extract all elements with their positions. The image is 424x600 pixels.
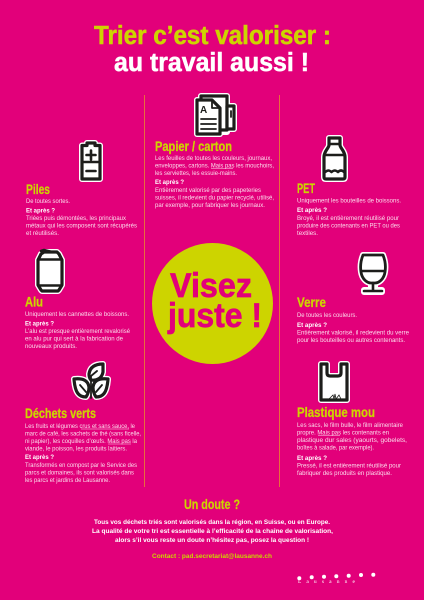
heading: Alu (25, 294, 43, 310)
text block: Transformés en compost par le Service des (25, 462, 138, 469)
text block: De toutes les couleurs. (297, 312, 357, 319)
text block: Et après ? (297, 207, 327, 214)
text block: Et après ? (297, 322, 327, 329)
heading: Piles (26, 182, 50, 197)
callout: visez juste: Visez (170, 267, 252, 305)
text block: textiles. (297, 230, 318, 237)
text block: marc de café, les sachets de thé (sans ficelle, (25, 430, 141, 438)
text block (297, 198, 401, 237)
logo: lausanne: L a u s a n n e (298, 579, 356, 585)
callout: visez juste (152, 243, 273, 364)
text block: Entièrement valorisé, il redevient du verre (297, 330, 409, 336)
icon: plastic bag (321, 364, 347, 400)
text block: closing message (92, 519, 333, 544)
text block: les parcs et jardins de Lausanne. (25, 477, 110, 484)
heading: PET (297, 181, 316, 196)
text block (25, 311, 130, 350)
text block: suisses, il redevient du papier recyclé, utilisé, (155, 194, 274, 202)
text block: boîtes à salade, par exemple). (297, 444, 374, 452)
title: au travail aussi ! (114, 49, 309, 77)
text block: Et après ? (297, 455, 327, 462)
text block (26, 198, 138, 237)
icon: battery (82, 143, 100, 179)
panel: papier carton (155, 96, 274, 209)
panel: verre (297, 255, 409, 344)
icon: wine glass (361, 255, 385, 292)
text block: propre. Mais pas les contenants en (297, 430, 389, 436)
text block: closing message: alors s’il vous reste un doute n’hésitez pas, posez la question ! (115, 537, 309, 544)
text block: métaux qui les composent sont récupérés (26, 222, 138, 230)
text block: closing message: La qualité de votre tri est essentielle à l’efficacité de la chaîne de valorisation, (92, 528, 333, 535)
text block: L’alu est presque entièrement revalorisé (25, 328, 130, 335)
text block (297, 422, 407, 477)
text block: plastique dur sales (yaourts, gobelets, (297, 437, 407, 444)
icon: leaves (74, 364, 108, 398)
text block: Uniquement les cannettes de boissons. (25, 311, 129, 318)
text block: les serviettes, les essuie-mains. (155, 170, 237, 177)
contact: Contact : pad.secretariat@lausanne.ch (152, 553, 272, 560)
text block: closing message: Tous vos déchets triés sont valorisés dans la région, en Suisse, ou en Europe. (94, 519, 330, 526)
text block: et réutilisés. (26, 230, 59, 237)
heading: Verre (297, 295, 326, 310)
title: Trier c’est valoriser : (94, 22, 331, 50)
text block: fabriquer des produits en plastique. (297, 470, 392, 477)
callout: visez juste: juste ! (167, 297, 262, 335)
text block: Les sacs, le film bulle, le film alimentaire (297, 422, 403, 429)
text block (155, 155, 274, 209)
text block: ni papier), les coquilles d’œufs. Mais pas la (25, 438, 137, 445)
text block: Les fruits et légumes crus et sans sauce, le (25, 423, 135, 430)
heading: un doute: Un doute ? (184, 497, 240, 512)
text block: par exemple, pour fabriquer les journaux. (155, 202, 265, 209)
text block: Entièrement valorisé par des papeteries (155, 187, 262, 194)
text block: Broyé, il est entièrement réutilisé pour (297, 215, 400, 222)
text block: nouveaux produits. (25, 343, 77, 350)
panel: piles (26, 143, 138, 237)
text block: parcs et domaines, ils sont valorisés dans (25, 470, 135, 476)
icon: bottle (324, 138, 345, 179)
text block: Et après ? (25, 320, 54, 328)
logo: lausanne (297, 573, 375, 585)
text block: Uniquement les bouteilles de boissons. (297, 198, 401, 204)
text block: Pressé, il est entièrement réutilisé pour (297, 462, 402, 470)
text block: Et après ? (26, 208, 55, 214)
text block (25, 423, 141, 484)
text block: produire des contenants en PET ou des (297, 222, 401, 230)
icon: can (38, 250, 62, 291)
text block: enveloppes, cartons. Mais pas les mouchoirs, (155, 162, 274, 170)
text block: viande, le poisson, les produits laitiers. (25, 446, 127, 452)
panel: dechets verts (25, 364, 141, 484)
panel: alu (25, 250, 130, 350)
text block: De toutes sortes. (26, 198, 70, 205)
heading: Papier / carton (155, 139, 232, 154)
text block: Et après ? (25, 454, 54, 461)
panel: plastique mou (297, 364, 407, 477)
text block: Et après ? (155, 179, 184, 186)
text block: Triées puis démontées, les principaux (26, 215, 127, 222)
text block: Les feuilles de toutes les couleurs, journaux, (155, 155, 272, 162)
text block: pour les bouteilles ou autres contenants. (297, 337, 405, 344)
heading: Plastique mou (297, 405, 375, 420)
icon: documents: A (200, 105, 207, 116)
text block (297, 312, 409, 344)
heading: Déchets verts (25, 406, 96, 421)
text block: en alu pur qui sert à la fabrication de (25, 336, 123, 342)
title (94, 22, 331, 77)
panel: pet (297, 138, 401, 237)
